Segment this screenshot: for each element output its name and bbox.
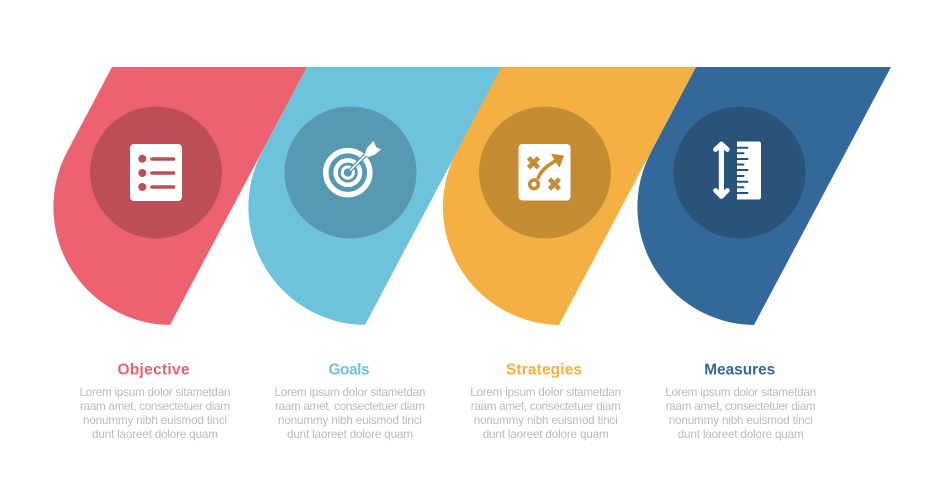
body: measures: dunt laoreet dolore quam bbox=[678, 428, 804, 441]
body: strategies bbox=[470, 386, 621, 441]
body: strategies: dunt laoreet dolore quam bbox=[483, 428, 609, 441]
icon circle: objective bbox=[90, 106, 222, 238]
heading: measures: Measures bbox=[704, 362, 775, 378]
icon: game plan bbox=[518, 144, 570, 200]
panel: goals shape bbox=[248, 67, 502, 325]
icon circle: goals bbox=[284, 106, 416, 238]
body: goals: nonummy nibh euismod tinci bbox=[278, 414, 422, 427]
body: objective: dunt laoreet dolore quam bbox=[92, 428, 218, 441]
icon circle: strategies bbox=[479, 106, 611, 238]
body: measures: nonummy nibh euismod tinci bbox=[669, 414, 813, 427]
body: objective: Lorem ipsum dolor sitametdan bbox=[80, 386, 230, 399]
body: objective bbox=[80, 386, 230, 441]
body: goals: dunt laoreet dolore quam bbox=[287, 428, 413, 441]
icon: checklist bbox=[130, 144, 182, 201]
body: measures: Lorem ipsum dolor sitametdan bbox=[665, 386, 816, 399]
heading: objective: Objective bbox=[118, 362, 190, 378]
text block: strategies bbox=[470, 362, 621, 441]
body: goals: raam amet, consectetuer diam bbox=[275, 400, 425, 413]
heading: goals: Goals bbox=[328, 362, 370, 378]
heading: strategies: Strategies bbox=[506, 362, 582, 378]
icon circle: measures bbox=[674, 106, 806, 238]
body: strategies: Lorem ipsum dolor sitametdan bbox=[470, 386, 621, 399]
panel: measures shape bbox=[637, 67, 891, 325]
panel: objective shape bbox=[53, 67, 307, 325]
panel: strategies shape bbox=[443, 67, 696, 325]
body: objective: nonummy nibh euismod tinci bbox=[83, 414, 227, 427]
icon: ruler and double arrow bbox=[716, 142, 761, 200]
body: strategies: nonummy nibh euismod tinci bbox=[474, 414, 618, 427]
text block: goals bbox=[274, 362, 426, 441]
text block: objective bbox=[80, 362, 230, 441]
body: objective: raam amet, consectetuer diam bbox=[80, 400, 230, 413]
text block: measures bbox=[665, 362, 816, 441]
body: goals: Lorem ipsum dolor sitametdan bbox=[274, 386, 426, 399]
body: strategies: raam amet, consectetuer diam bbox=[471, 400, 621, 413]
icon: target with arrow bbox=[326, 141, 381, 195]
body: measures bbox=[665, 386, 816, 441]
body: goals bbox=[274, 386, 426, 441]
body: measures: raam amet, consectetuer diam bbox=[666, 400, 816, 413]
